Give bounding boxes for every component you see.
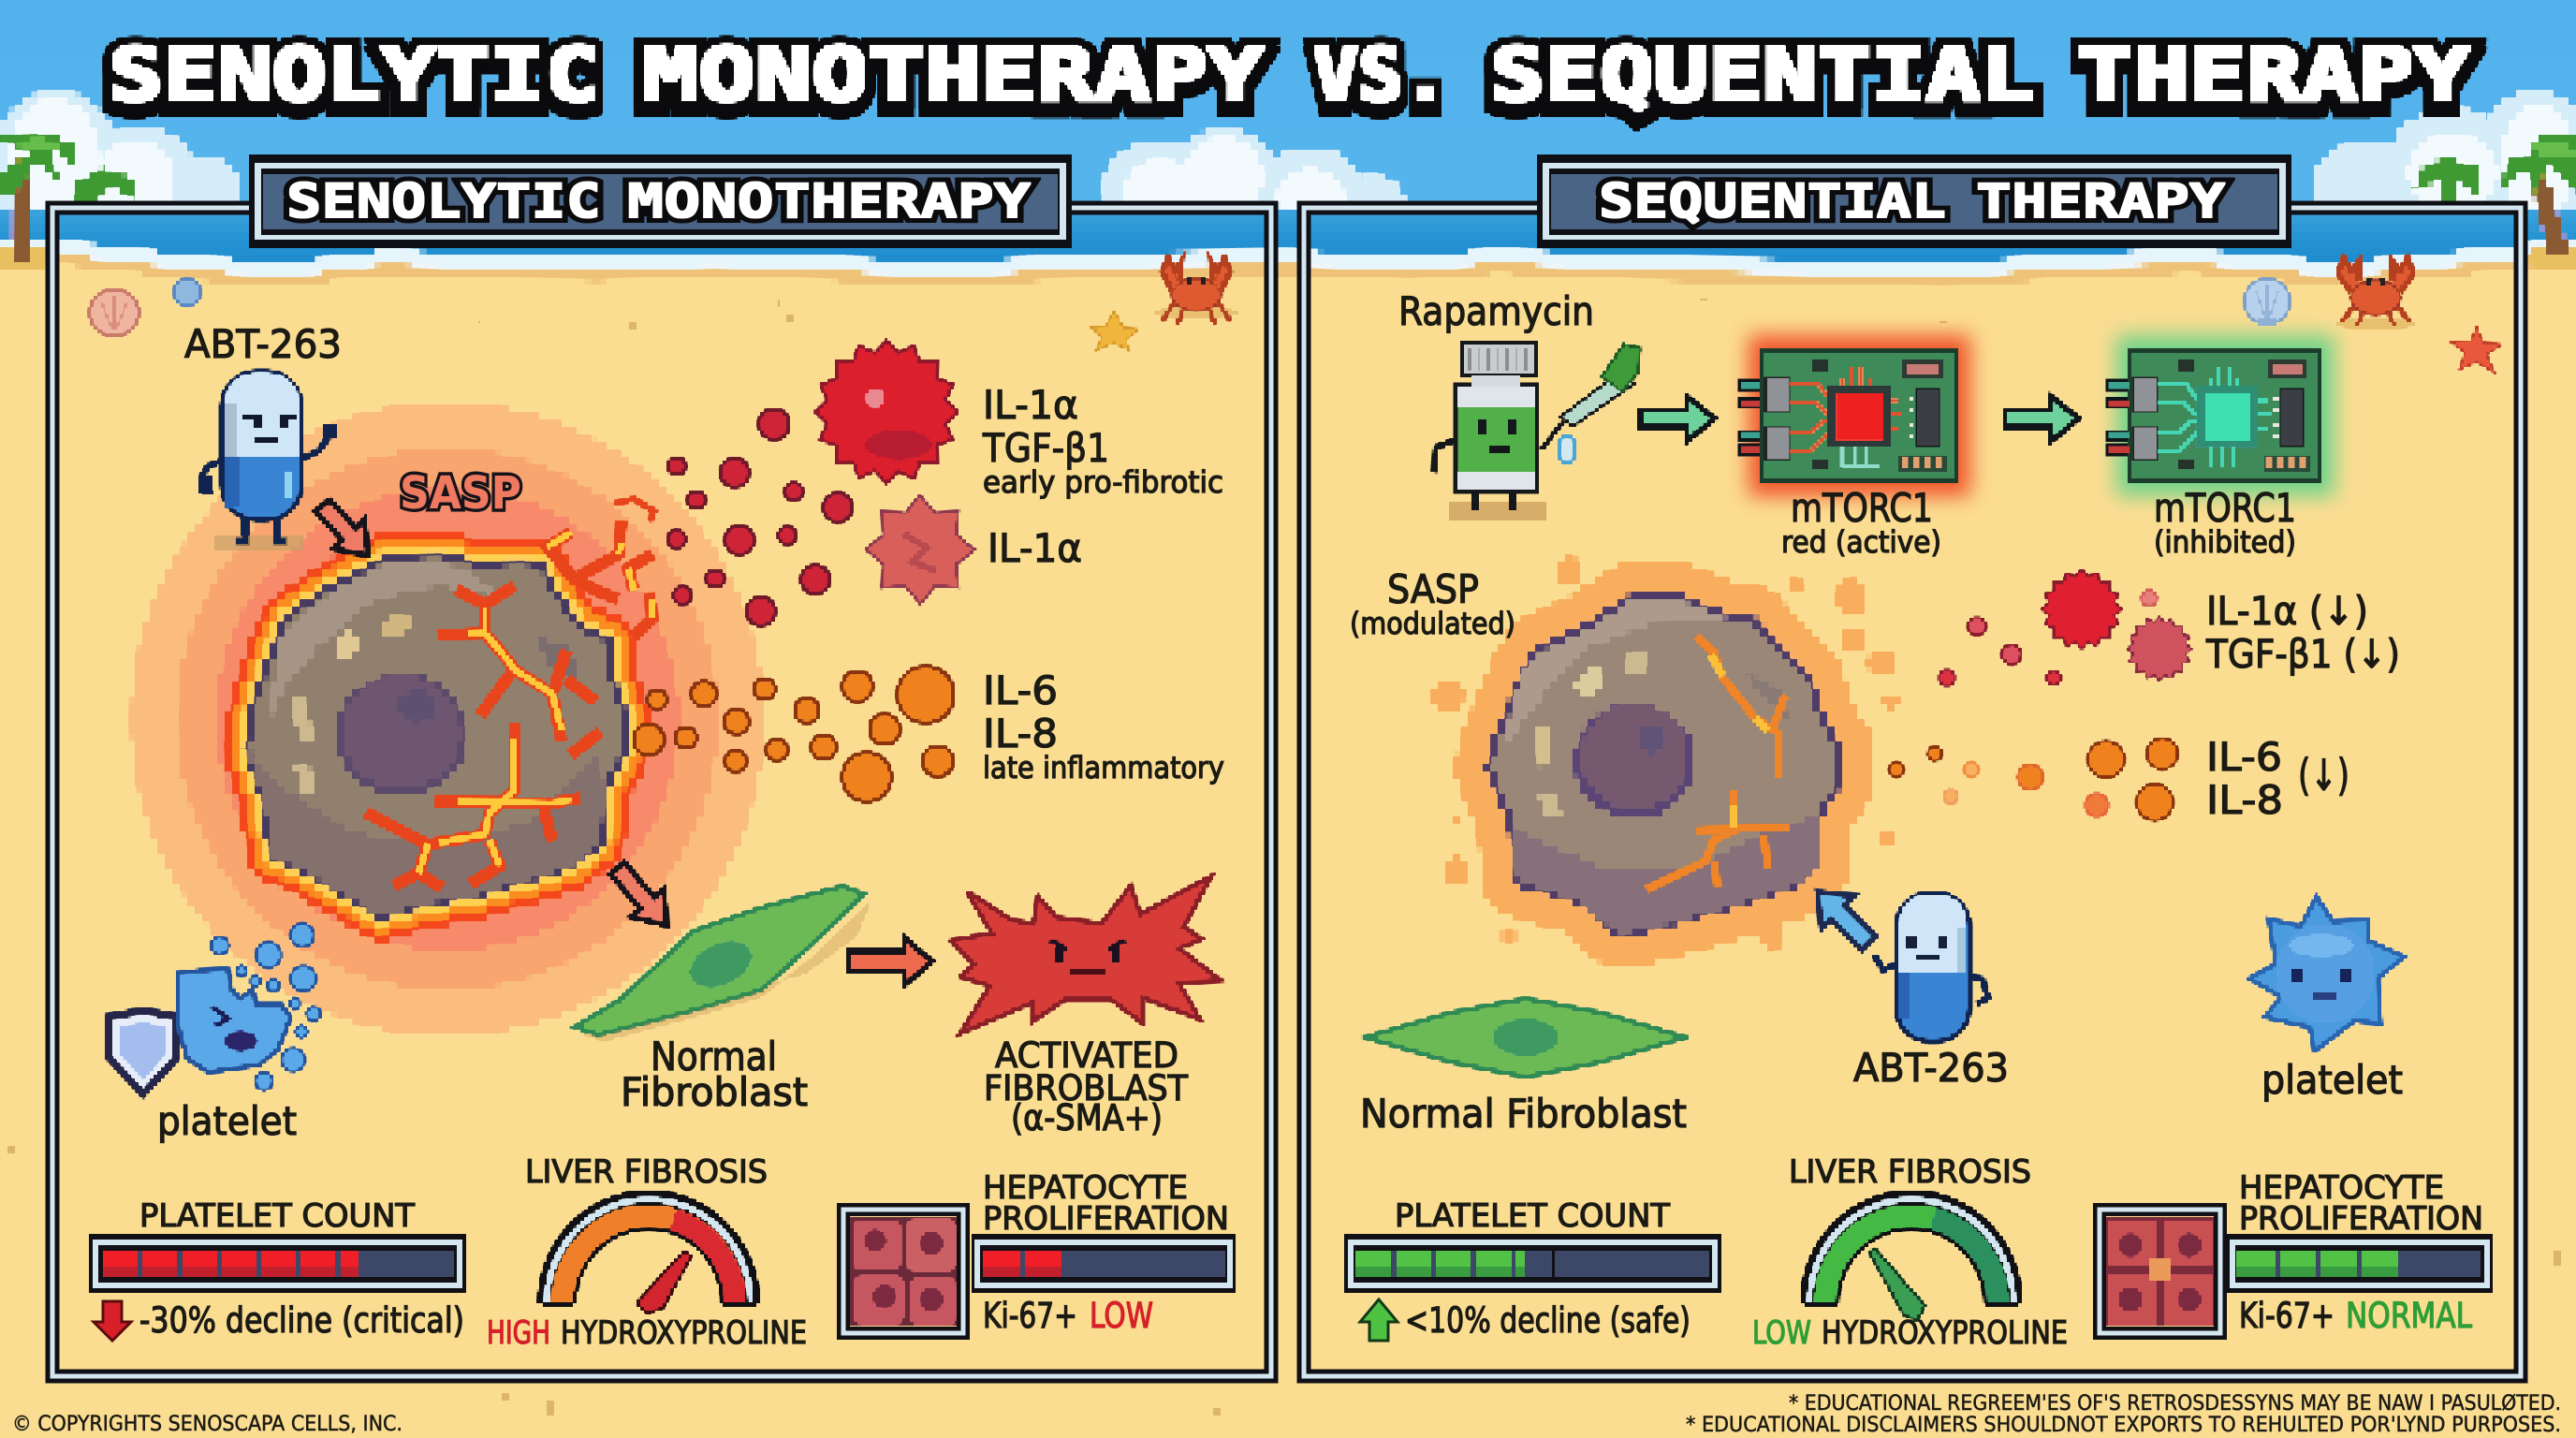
label: low hydroxyproline: HYDROXYPROLINE bbox=[1822, 1314, 2068, 1352]
chip glow: green bbox=[2116, 335, 2334, 496]
arrow: cell to fibroblast bbox=[611, 863, 666, 925]
decor: shell, crab and starfish bbox=[2245, 258, 2501, 372]
cytokine: pink spiky bbox=[869, 498, 972, 601]
hepatocyte frame bbox=[2100, 1210, 2220, 1333]
label: platelet count: PLATELET COUNT bbox=[1395, 1197, 1670, 1235]
sand speckles bbox=[7, 296, 2561, 1416]
arrow: pill to cell bbox=[1818, 892, 1875, 949]
label: decline safe: <10% decline (safe) bbox=[1405, 1300, 1690, 1341]
cytokine: pink spiky reduced bbox=[2120, 609, 2199, 688]
SASP glow and senescent cell body bbox=[131, 403, 764, 1035]
activated fibroblast bbox=[952, 877, 1220, 1033]
label: high hydroxyproline: HIGH bbox=[487, 1314, 550, 1352]
title: VS. bbox=[1313, 34, 1448, 118]
chip: mTORC1 active bbox=[1740, 347, 1956, 484]
arrow: activation bbox=[849, 938, 931, 985]
pill character: ABT-263 bbox=[1874, 893, 1988, 1041]
icon: green up arrow bbox=[1360, 1299, 1398, 1341]
label: down marker: (↓) bbox=[2298, 750, 2349, 800]
healthy platelet bbox=[2250, 898, 2403, 1050]
hepatocyte cells bbox=[850, 1217, 959, 1327]
chip: mTORC1 inhibited bbox=[2108, 347, 2320, 484]
label: SASP modulated: SASP bbox=[1387, 566, 1479, 612]
panel: sequential therapy bbox=[1304, 154, 2521, 1376]
gauge: liver fibrosis high bbox=[539, 1199, 758, 1304]
hepatocyte cells healthy bbox=[2106, 1217, 2216, 1327]
chip glow: red bbox=[1749, 335, 1970, 496]
label: mTORC1 active: red (active) bbox=[1781, 524, 1941, 560]
panel header bbox=[249, 154, 1072, 248]
title: MONOTHERAPY bbox=[642, 34, 1264, 118]
label: late inflammatory: late inflammatory bbox=[983, 750, 1224, 785]
gauge needle bbox=[1869, 1250, 1925, 1320]
label: activated fibroblast: FIBROBLAST bbox=[984, 1068, 1188, 1108]
label: normal fibroblast: Fibroblast bbox=[621, 1069, 808, 1115]
label: SASP modulated bbox=[1350, 566, 1515, 641]
label: hepatocyte proliferation: HEPATOCYTE bbox=[983, 1169, 1188, 1207]
cytokines: red SASP particles bbox=[668, 409, 852, 625]
damaged platelet bbox=[108, 924, 320, 1095]
label: hepatocyte proliferation: PROLIFERATION bbox=[983, 1200, 1229, 1238]
label: Ki-67 low: Ki-67+ bbox=[983, 1296, 1077, 1336]
panel: senolytic monotherapy bbox=[52, 154, 1271, 1376]
label: Rapamycin: Rapamycin bbox=[1398, 288, 1594, 334]
palms left bbox=[0, 131, 136, 271]
label: liver fibrosis: LIVER FIBROSIS bbox=[1789, 1153, 2031, 1191]
label: IL-1a down: IL-1α (↓) bbox=[2206, 588, 2368, 634]
platelet bar bbox=[89, 1234, 466, 1293]
label: IL-6: IL-6 bbox=[2206, 734, 2282, 780]
cytokines: reduced red bbox=[1939, 591, 2157, 685]
cytokine: big red spiky bbox=[798, 323, 975, 501]
icon: red down arrow bbox=[94, 1301, 131, 1341]
pill character: ABT-263 bbox=[198, 372, 337, 550]
platelet bar bbox=[1344, 1234, 1721, 1293]
label: IL-1a: IL-1α bbox=[983, 382, 1078, 428]
arrow: active to inhibited bbox=[2005, 397, 2078, 441]
label: hepatocyte proliferation: PROLIFERATION bbox=[2239, 1200, 2483, 1238]
panel header bbox=[1537, 154, 2291, 248]
normal fibroblast bbox=[1367, 999, 1684, 1077]
panel header: MONOTHERAPY bbox=[627, 174, 1031, 228]
panel frame bbox=[1304, 208, 2521, 1376]
label: decline critical: -30% decline (critical) bbox=[139, 1300, 464, 1341]
cytokines: orange SASP particles bbox=[634, 667, 954, 801]
label: IL-1a second: IL-1α bbox=[988, 525, 1082, 571]
label: Ki-67 low bbox=[983, 1296, 1153, 1336]
label: IL-8: IL-8 bbox=[983, 711, 1058, 756]
label: IL-8: IL-8 bbox=[2206, 777, 2283, 823]
label: platelet: platelet bbox=[157, 1098, 297, 1144]
label: hepatocyte proliferation bbox=[2239, 1169, 2483, 1238]
panel frame bbox=[52, 208, 1271, 1376]
hepatocyte frame bbox=[843, 1210, 963, 1333]
label: Ki-67 low: LOW bbox=[1090, 1296, 1153, 1336]
label: activated fibroblast: (α-SMA+) bbox=[1011, 1097, 1163, 1138]
label: high hydroxyproline: HYDROXYPROLINE bbox=[561, 1314, 807, 1352]
label: SASP: SASP bbox=[400, 467, 521, 520]
label: mTORC1 inhibited bbox=[2154, 485, 2296, 560]
proliferation bar bbox=[972, 1234, 1236, 1293]
panel header: SENOLYTIC bbox=[286, 174, 601, 228]
rapamycin bottle character bbox=[1434, 344, 1640, 520]
label: Ki-67 normal: Ki-67+ bbox=[2239, 1296, 2334, 1336]
title: SENOLYTIC bbox=[109, 34, 599, 118]
modulated SASP halo and cell body bbox=[1432, 557, 1898, 949]
illustrations bbox=[1367, 258, 2501, 1327]
label: low hydroxyproline bbox=[1752, 1314, 2068, 1352]
palms right bbox=[2413, 136, 2576, 271]
label: normal fibroblast: Normal bbox=[651, 1034, 777, 1079]
label: platelet count: PLATELET COUNT bbox=[139, 1197, 415, 1235]
label: ABT-263: ABT-263 bbox=[184, 321, 342, 367]
proliferation bar bbox=[2227, 1234, 2493, 1293]
clouds bbox=[0, 90, 2576, 247]
label: normal fibroblast: Normal Fibroblast bbox=[1360, 1091, 1687, 1137]
footer disclaimer bbox=[1686, 1392, 2561, 1437]
title bbox=[109, 34, 2470, 118]
label: hepatocyte proliferation bbox=[983, 1169, 1229, 1238]
panel header: THERAPY bbox=[1976, 174, 2225, 228]
label: Ki-67 normal bbox=[2239, 1296, 2472, 1336]
arrow: rapamycin to mTORC1 bbox=[1641, 397, 1714, 441]
label: mTORC1 inhibited: mTORC1 bbox=[2154, 485, 2296, 531]
panel header: SEQUENTIAL bbox=[1599, 174, 1946, 228]
title: SEQUENTIAL bbox=[1490, 34, 2035, 118]
label: hepatocyte proliferation: HEPATOCYTE bbox=[2239, 1169, 2444, 1207]
label: mTORC1 active bbox=[1781, 485, 1941, 560]
label: SASP modulated: (modulated) bbox=[1350, 606, 1515, 641]
arrow: pill to cell bbox=[316, 500, 368, 555]
cell cracks bbox=[366, 499, 654, 888]
label: IL-6: IL-6 bbox=[983, 668, 1058, 713]
sea bbox=[0, 211, 2576, 286]
title: THERAPY bbox=[2077, 34, 2470, 118]
gauge: liver fibrosis low bbox=[1805, 1199, 2018, 1304]
label: TGF-b1: TGF-β1 bbox=[982, 425, 1109, 471]
label: platelet: platelet bbox=[2261, 1057, 2403, 1103]
label: high hydroxyproline bbox=[487, 1314, 807, 1352]
cytokine: red spiky reduced bbox=[2033, 561, 2130, 658]
normal fibroblast bbox=[576, 887, 871, 1041]
gauge needle bbox=[637, 1252, 691, 1313]
label: Ki-67 normal: NORMAL bbox=[2346, 1296, 2472, 1336]
footer copyright: © COPYRIGHTS SENOSCAPA CELLS, INC. bbox=[12, 1413, 402, 1436]
label: normal fibroblast bbox=[621, 1034, 808, 1115]
illustrations bbox=[90, 258, 1237, 1327]
label: low hydroxyproline: LOW bbox=[1752, 1314, 1811, 1352]
label: mTORC1 inhibited: (inhibited) bbox=[2154, 524, 2296, 560]
decor: shells, crab and starfish bbox=[90, 258, 1237, 349]
label: liver fibrosis: LIVER FIBROSIS bbox=[525, 1153, 768, 1191]
label: ABT-263: ABT-263 bbox=[1853, 1045, 2009, 1091]
label: activated fibroblast bbox=[984, 1035, 1188, 1138]
label: mTORC1 active: mTORC1 bbox=[1791, 485, 1933, 531]
label: activated fibroblast: ACTIVATED bbox=[995, 1035, 1178, 1076]
label: early pro-fibrotic: early pro-fibrotic bbox=[983, 464, 1223, 500]
label: TGF-b1 down: TGF-β1 (↓) bbox=[2205, 631, 2400, 677]
cell cracks muted bbox=[1647, 637, 1789, 889]
cytokines: reduced orange bbox=[1890, 739, 2177, 820]
